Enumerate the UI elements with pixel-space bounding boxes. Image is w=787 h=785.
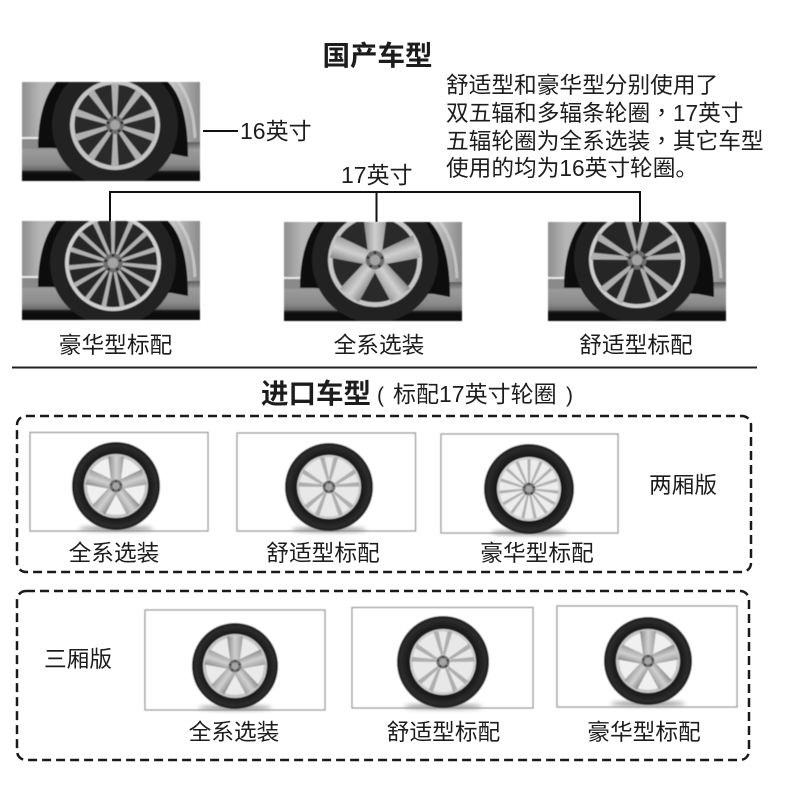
captions: sedan: 豪华型标配 (587, 719, 701, 745)
text block: wheel description: 五辐轮圈为全系选装，其它车型 (446, 123, 764, 156)
photo: five-spoke wheel (284, 197, 462, 323)
captions: domestic wheels: 舒适型标配 (579, 332, 693, 358)
wheel frame: hatchback luxury (441, 434, 618, 535)
panel: sedan (17, 591, 749, 760)
heading: imported models: ( (377, 384, 384, 407)
captions: hatchback: 豪华型标配 (480, 540, 594, 566)
photo: 16-inch wheel (22, 62, 200, 188)
wheel frame: sedan comfort (352, 608, 533, 709)
wheel frame: hatchback comfort (237, 433, 416, 532)
label: 16-inch: 16英寸 (240, 118, 312, 144)
captions: domestic wheels: 全系选装 (334, 332, 424, 358)
wheel frame: sedan luxury (557, 606, 737, 707)
captions: hatchback (69, 540, 594, 566)
panel: hatchback (17, 416, 751, 572)
heading: imported models: 进口车型 (261, 378, 371, 409)
photo: multi-spoke wheel (22, 200, 200, 326)
connector: 17-inch bracket (110, 192, 640, 222)
connector: 16-inch line (203, 130, 238, 132)
text block: wheel description: 舒适型和豪华型分别使用了 (446, 72, 718, 98)
captions: hatchback: 舒适型标配 (266, 540, 380, 566)
captions: sedan: 舒适型标配 (387, 719, 500, 745)
captions: domestic wheels: 豪华型标配 (59, 332, 172, 358)
captions: hatchback: 全系选装 (69, 540, 159, 566)
label: hatchback: 两厢版 (649, 472, 717, 498)
captions: domestic wheels (59, 332, 693, 358)
title: domestic models: 国产车型 (322, 40, 432, 71)
label: sedan: 三厢版 (44, 646, 112, 672)
text block: wheel description: 使用的均为16英寸轮圈。 (446, 155, 698, 181)
text block: wheel description: 双五辐和多辐条轮圈，17英寸 (446, 95, 744, 128)
text block: wheel description (446, 72, 764, 181)
heading: imported models (261, 378, 573, 409)
captions: sedan: 全系选装 (189, 719, 279, 745)
wheel frame: sedan all-series option (145, 610, 325, 710)
wheel frame: hatchback all-series option (30, 432, 208, 531)
photo: double five-spoke wheel (548, 197, 726, 323)
label: 17-inch: 17英寸 (341, 162, 413, 188)
heading: imported models: ) (566, 384, 573, 407)
heading: imported models: 标配17英寸轮圈 (393, 381, 557, 407)
captions: sedan (189, 719, 701, 745)
